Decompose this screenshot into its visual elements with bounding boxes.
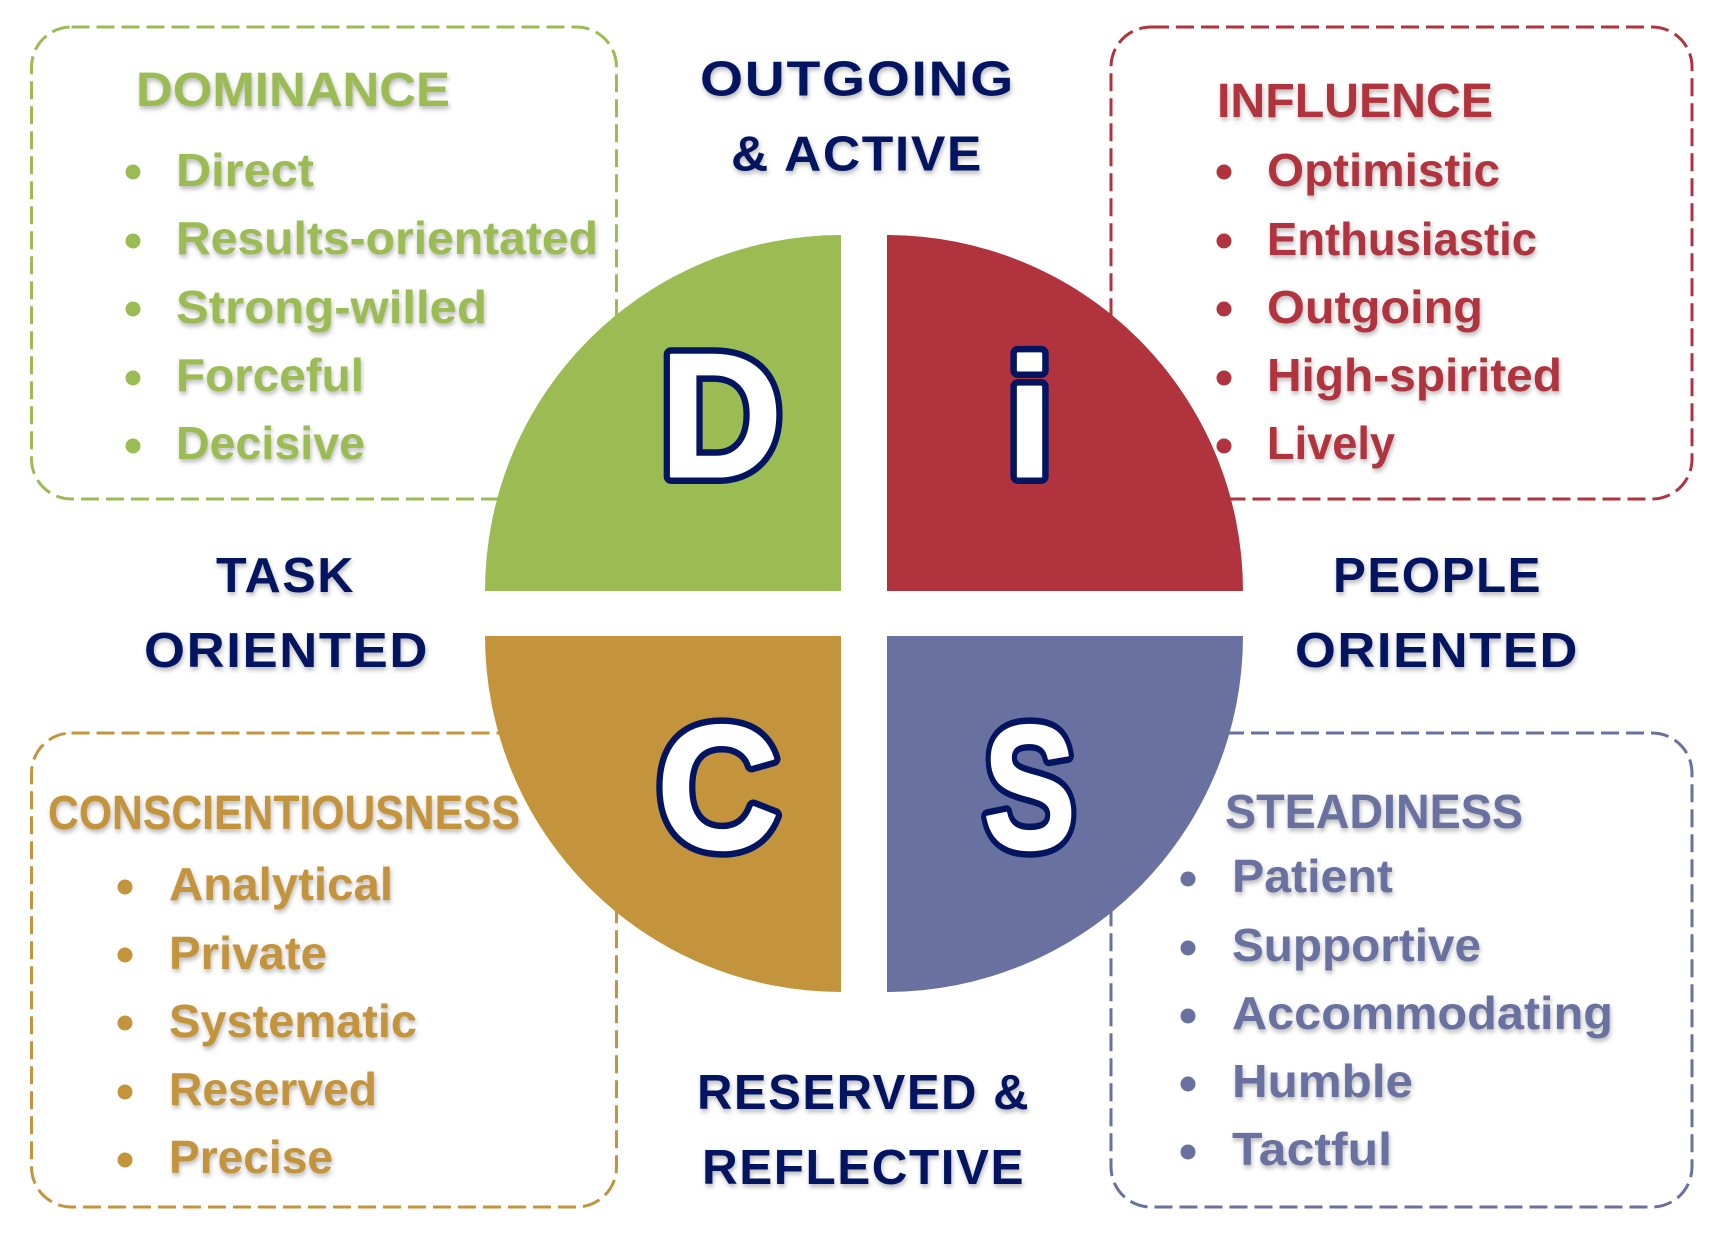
heading: steadiness: STEADINESS [1225,786,1523,839]
list: influence traits: Optimistic [1267,144,1500,196]
quadrant: S [887,636,1243,992]
list: influence traits: Enthusiastic [1267,213,1537,265]
list: steadiness traits: Accommodating [1232,987,1613,1039]
panel: dominance [32,27,616,499]
heading: influence: INFLUENCE [1217,75,1493,128]
letter S: S [983,688,1076,886]
list: dominance traits: Decisive [176,417,365,469]
label: people oriented: ORIENTED [1295,624,1579,678]
label: reserved and reflective: RESERVED & [697,1066,1030,1120]
panel: conscientiousness [32,733,616,1207]
letter D: D [660,316,782,514]
list: conscientiousness traits: Analytical [169,858,393,910]
list: steadiness traits: Humble [1232,1055,1413,1107]
list: conscientiousness traits [118,858,417,1183]
list: influence traits: Outgoing [1267,281,1483,333]
list: dominance traits: Forceful [176,349,364,401]
list: conscientiousness traits: Reserved [169,1063,377,1115]
letter C: C [656,688,780,886]
quadrant: C [485,636,841,992]
label: reserved and reflective [697,1066,1030,1195]
label: people oriented: PEOPLE [1333,549,1542,603]
letter i: i [1006,324,1053,514]
label: outgoing and active: & ACTIVE [731,128,983,182]
list: influence traits: Lively [1267,417,1395,469]
label: outgoing and active: OUTGOING [700,52,1015,106]
label: task oriented: ORIENTED [144,624,429,678]
label: outgoing and active [700,52,1015,182]
list: conscientiousness traits: Precise [169,1131,333,1183]
panel: steadiness [1111,733,1692,1207]
label: people oriented [1295,549,1579,678]
quadrant: i [887,235,1243,591]
list: conscientiousness traits: Systematic [169,995,417,1047]
heading: dominance: DOMINANCE [136,64,450,117]
letter C: C [656,688,780,886]
list: influence traits: High-spirited [1267,349,1562,401]
label: task oriented [144,549,429,678]
label: reserved and reflective: REFLECTIVE [702,1141,1025,1195]
list: steadiness traits: Tactful [1232,1123,1392,1175]
label: task oriented: TASK [216,549,355,603]
letter D: D [660,316,782,514]
list: dominance traits: Results-orientated [176,212,598,264]
list: dominance traits [126,144,598,469]
heading: conscientiousness: CONSCIENTIOUSNESS [48,787,520,840]
list: influence traits [1216,144,1562,469]
list: steadiness traits [1180,850,1613,1175]
list: dominance traits: Strong-willed [176,281,487,333]
panel: influence [1111,27,1692,499]
list: conscientiousness traits: Private [169,927,327,979]
letter i: i [1006,324,1053,514]
letter S: S [983,688,1076,886]
list: steadiness traits: Patient [1232,850,1393,902]
quadrant: D [485,235,841,591]
list: dominance traits: Direct [176,144,314,196]
list: steadiness traits: Supportive [1232,919,1481,971]
